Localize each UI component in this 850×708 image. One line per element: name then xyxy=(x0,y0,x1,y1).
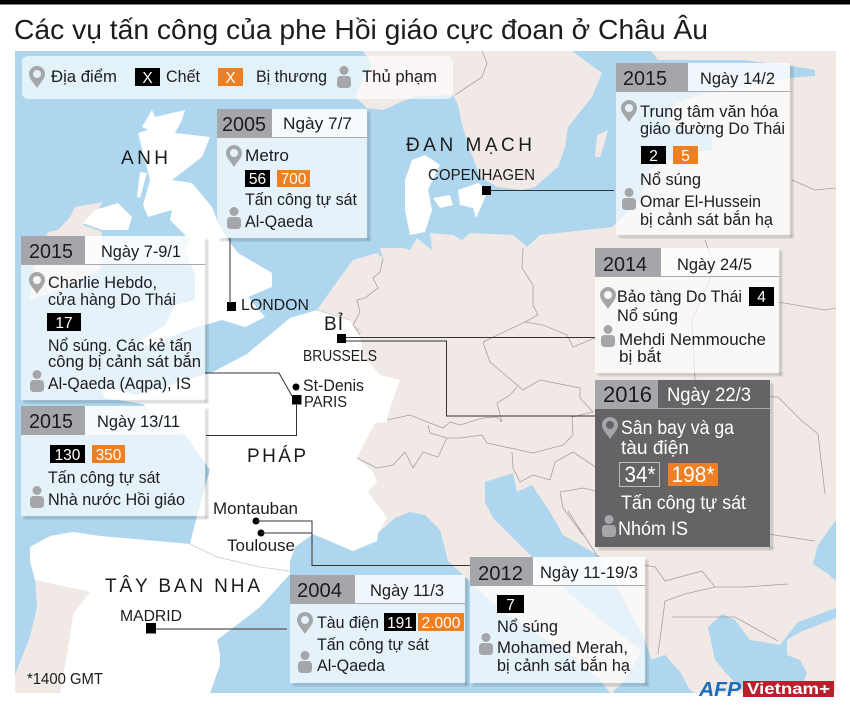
city label: Copenhagen: COPENHAGEN xyxy=(428,167,535,184)
place: Trung tâm văn hóa xyxy=(640,102,779,121)
date: Ngày 22/3 xyxy=(667,385,751,406)
perpetrator: Al-Qaeda xyxy=(317,656,386,675)
connector: St-Denis and Paris xyxy=(205,373,302,436)
perpetrator: Nhà nước Hồi giáo xyxy=(48,490,185,509)
attack type: Nổ súng xyxy=(617,306,678,325)
panel: 2015 November Paris xyxy=(21,406,208,519)
panel: 2004 Madrid xyxy=(290,575,468,686)
injured: 350 xyxy=(96,447,122,464)
city label: Paris: PARIS xyxy=(304,394,347,411)
legend key: deaths xyxy=(135,68,160,87)
perpetrator: Al-Qaeda (Aqpa), IS xyxy=(48,374,191,393)
city label: St-Denis: St-Denis xyxy=(303,376,364,395)
year: 2015 xyxy=(623,68,667,90)
icon: location pin xyxy=(602,417,618,439)
injured xyxy=(673,146,698,165)
description: Nổ súng. Các kẻ tấn xyxy=(48,336,192,355)
perpetrator: Omar El-Hussein xyxy=(640,192,761,211)
year: 2005 xyxy=(222,114,266,136)
connector: Copenhagen xyxy=(482,186,614,195)
panel: 2005 London xyxy=(217,109,370,241)
injured: 5 xyxy=(681,148,690,165)
icon: perpetrator xyxy=(601,325,615,347)
icon: location pin xyxy=(621,100,637,122)
deaths xyxy=(497,595,524,614)
country label: UK: ANH xyxy=(121,148,168,169)
deaths xyxy=(245,170,270,188)
title: Các vụ tấn công của phe Hồi giáo cực đoan ở Châu Âu xyxy=(14,14,708,45)
deaths: 56 xyxy=(249,171,266,188)
perpetrator: Al-Qaeda xyxy=(245,212,314,231)
icon: perpetrator xyxy=(30,370,44,392)
city label: Brussels: BRUSSELS xyxy=(303,348,377,365)
legend icon: perpetrator xyxy=(337,66,351,88)
attack type: Tấn công tự sát xyxy=(245,190,357,209)
icon: location pin xyxy=(297,612,313,634)
deaths: 4 xyxy=(757,289,766,306)
attack type: Nổ súng xyxy=(640,170,701,189)
year: 2015 xyxy=(29,241,73,263)
top black bar xyxy=(0,0,850,4)
description line 2: công bị cảnh sát bắn xyxy=(48,352,201,371)
place: Charlie Hebdo, xyxy=(48,273,157,292)
place line 2: tàu điện xyxy=(621,438,689,459)
date: Ngày 13/11 xyxy=(97,413,180,431)
city label: Toulouse: Toulouse xyxy=(227,536,295,555)
perpetrator outcome: bị bắt xyxy=(619,347,661,366)
perpetrator: Mehdi Nemmouche xyxy=(619,330,766,349)
deaths: 17 xyxy=(55,315,73,332)
legend label: location: Địa điểm xyxy=(51,67,117,86)
icon: perpetrator xyxy=(30,486,44,508)
panel: 2012 Toulouse xyxy=(470,557,648,686)
legend key: injured xyxy=(218,68,243,87)
perpetrator outcome: bị cảnh sát bắn hạ xyxy=(640,210,774,229)
city label: London: LONDON xyxy=(241,297,309,314)
connector: London xyxy=(227,238,236,311)
place: Sân bay và ga xyxy=(621,418,734,439)
legend label: perpetrator: Thủ phạm xyxy=(362,67,437,86)
place: Metro xyxy=(245,146,289,165)
place: Tàu điện xyxy=(317,613,379,632)
icon: perpetrator xyxy=(298,651,312,673)
connector: Madrid xyxy=(146,623,287,634)
country label: Belgium: BỈ xyxy=(324,313,343,335)
deaths: 7 xyxy=(506,597,515,614)
city label: Montauban: Montauban xyxy=(213,499,298,518)
perpetrator outcome: bị cảnh sát bắn hạ xyxy=(497,656,631,675)
year: 2015 xyxy=(29,411,73,433)
deaths: 34* xyxy=(624,462,656,487)
year: 2004 xyxy=(297,580,342,602)
attack type: Tấn công tự sát xyxy=(317,635,429,654)
date: Ngày 7/7 xyxy=(283,115,352,133)
deaths: 130 xyxy=(55,447,81,464)
icon: perpetrator xyxy=(227,207,241,229)
connector: Montauban and Toulouse xyxy=(252,518,470,566)
perpetrator: Mohamed Merah, xyxy=(497,638,628,657)
legend icon: location pin xyxy=(29,66,45,88)
date: Ngày 11-19/3 xyxy=(540,564,638,582)
connector: Brussels xyxy=(337,334,595,416)
year: 2014 xyxy=(603,254,647,276)
attack type: Nổ súng xyxy=(497,617,558,636)
date: Ngày 24/5 xyxy=(677,256,752,274)
icon: location pin xyxy=(29,272,45,294)
injured: 700 xyxy=(281,171,307,188)
deaths xyxy=(641,146,666,165)
country label: Denmark: ĐAN MẠCH xyxy=(406,135,532,156)
deaths xyxy=(47,313,81,332)
attack type: Tấn công tự sát xyxy=(621,493,747,514)
legend key: injured: X xyxy=(225,70,236,87)
icon: perpetrator xyxy=(622,188,636,210)
deaths: 2 xyxy=(649,148,658,165)
logo: Vietnam+: Vietnam+ xyxy=(747,681,830,698)
country label: France: PHÁP xyxy=(247,446,306,467)
footnote: *1400 GMT xyxy=(27,671,103,688)
date: Ngày 14/2 xyxy=(700,70,775,88)
place: Bảo tàng Do Thái xyxy=(617,287,742,306)
perpetrator: Nhóm IS xyxy=(618,519,688,540)
panel: 2015 January Paris xyxy=(21,236,208,403)
panel: 2016 Brussels xyxy=(595,380,773,550)
year: 2012 xyxy=(478,563,523,585)
legend key: deaths: X xyxy=(142,70,153,87)
deaths xyxy=(749,287,774,306)
legend xyxy=(22,56,453,99)
city label: Madrid: MADRID xyxy=(120,608,182,625)
icon: location pin xyxy=(226,145,242,167)
date: Ngày 7-9/1 xyxy=(101,243,181,261)
place line 2: cửa hàng Do Thái xyxy=(48,290,176,309)
deaths: 191 xyxy=(387,615,413,632)
icon: perpetrator xyxy=(479,633,493,655)
place line 2: giáo đường Do Thái xyxy=(640,119,785,138)
icon: perpetrator xyxy=(602,515,616,537)
logo: AFP: AFP xyxy=(698,679,742,701)
icon: location pin xyxy=(600,287,616,309)
year: 2016 xyxy=(603,382,652,407)
panel: 2015 Copenhagen xyxy=(616,63,793,238)
injured: 2.000 xyxy=(422,615,461,632)
attack type: Tấn công tự sát xyxy=(48,468,160,487)
injured: 198* xyxy=(672,462,715,487)
country label: Spain: TÂY BAN NHA xyxy=(105,575,260,597)
panel: 2014 Brussels xyxy=(595,248,782,376)
date: Ngày 11/3 xyxy=(370,582,444,600)
legend label: injured: Bị thương xyxy=(256,67,327,86)
deaths xyxy=(50,445,85,464)
legend label: deaths: Chết xyxy=(166,67,200,86)
